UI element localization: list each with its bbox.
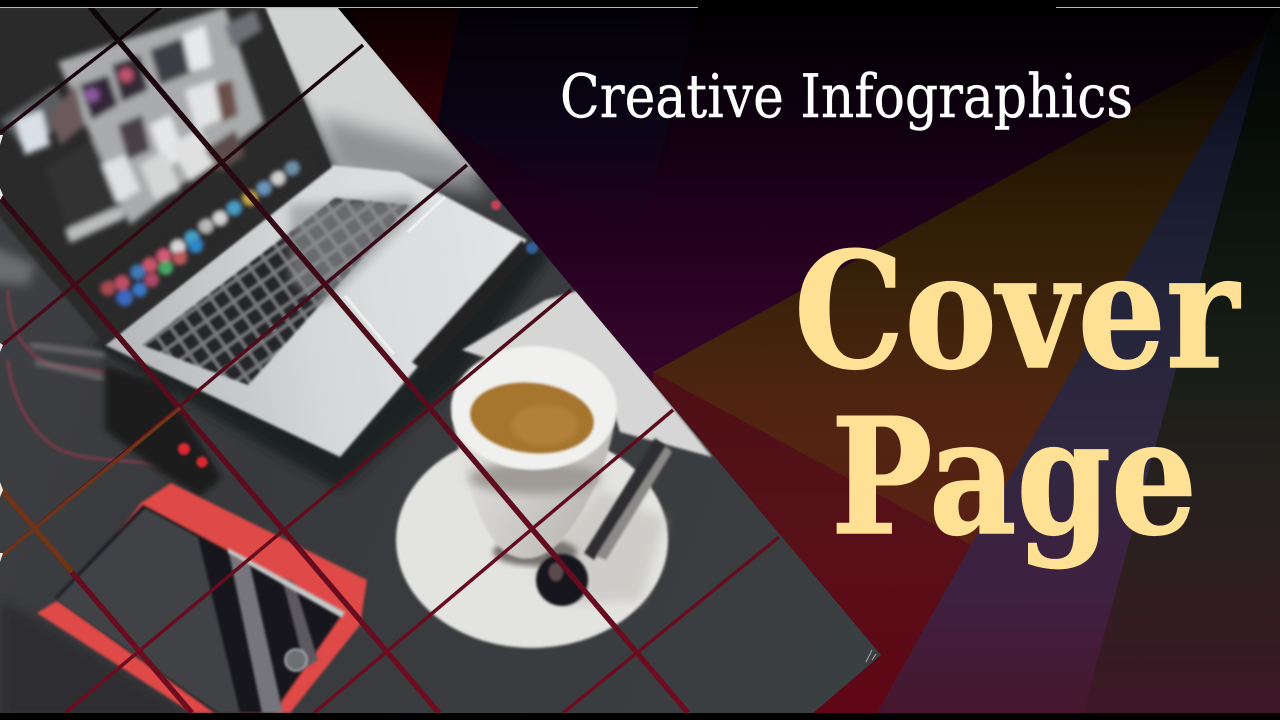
- phone body: [55, 505, 343, 713]
- phone home button: [285, 649, 307, 671]
- wedge: dark red top: [345, 7, 460, 125]
- phone top highlight edge: [228, 548, 345, 618]
- subtitle: Creative Infographics: Creative Infographics: [560, 62, 1133, 132]
- brown tint on lower left lines: [0, 408, 180, 572]
- phone: [55, 505, 345, 713]
- top rule right: [1056, 7, 1280, 8]
- cup rim: [451, 346, 617, 470]
- wedge: navy top: [437, 7, 698, 240]
- title: Page: Page: [831, 383, 1197, 571]
- specks at corner: [866, 650, 876, 662]
- spoon: [536, 438, 672, 606]
- cup shadow under rim: [469, 462, 601, 494]
- white ticks on left edge: [0, 135, 3, 562]
- top rule left: [0, 7, 698, 8]
- cup body: [452, 415, 616, 559]
- saucer plate: [396, 432, 668, 648]
- screen frame: [0, 7, 332, 345]
- keyboard: [142, 198, 410, 385]
- wedge: orange: [653, 35, 1265, 545]
- paper sheet: [462, 290, 712, 457]
- blurred backdrop behind laptop: [254, 8, 480, 180]
- laptop shadow: [90, 235, 550, 490]
- colored bits behind laptop: [491, 200, 501, 210]
- coffee crema: [468, 380, 596, 456]
- laptop base: [105, 165, 527, 457]
- blurred upper keyboard: [290, 195, 420, 305]
- gadget red lights: [178, 443, 208, 468]
- black gadget: [105, 365, 222, 497]
- bottom black band: [0, 713, 1280, 720]
- photo panel: laptop, coffee and phone on desk: [0, 0, 900, 720]
- background wedges: [345, 7, 1280, 713]
- red cable: [6, 289, 156, 467]
- screen content: [0, 7, 264, 243]
- laptop: [0, 7, 550, 490]
- coffee cup: [451, 346, 617, 566]
- saucer: [396, 432, 668, 648]
- grid lines over photo: [0, 7, 779, 713]
- desk surface: [0, 7, 900, 717]
- wedge: blue purple: [870, 30, 1268, 713]
- blurred grey shelf behind laptop: [320, 115, 490, 195]
- left monitor stand: [0, 245, 35, 285]
- dark desk corner bottom left: [0, 604, 182, 713]
- diagonal lines falling right: [0, 7, 688, 713]
- phone glass grey area: [56, 508, 240, 713]
- phone reflection stripes: [229, 553, 283, 713]
- white edge highlights: [345, 197, 445, 354]
- top black band: [0, 0, 1280, 7]
- cable bundle: [30, 345, 105, 378]
- wedge: charcoal right: [1075, 7, 1280, 713]
- app dock: [97, 158, 302, 309]
- black cable beside laptop: [412, 240, 530, 372]
- coffee highlight: [511, 405, 579, 445]
- wedge: red lower: [640, 372, 975, 713]
- diagonal lines rising right: [0, 7, 779, 713]
- saucer shade: [530, 490, 665, 605]
- red phone case: [37, 483, 367, 713]
- cup bottom shadow: [493, 538, 577, 566]
